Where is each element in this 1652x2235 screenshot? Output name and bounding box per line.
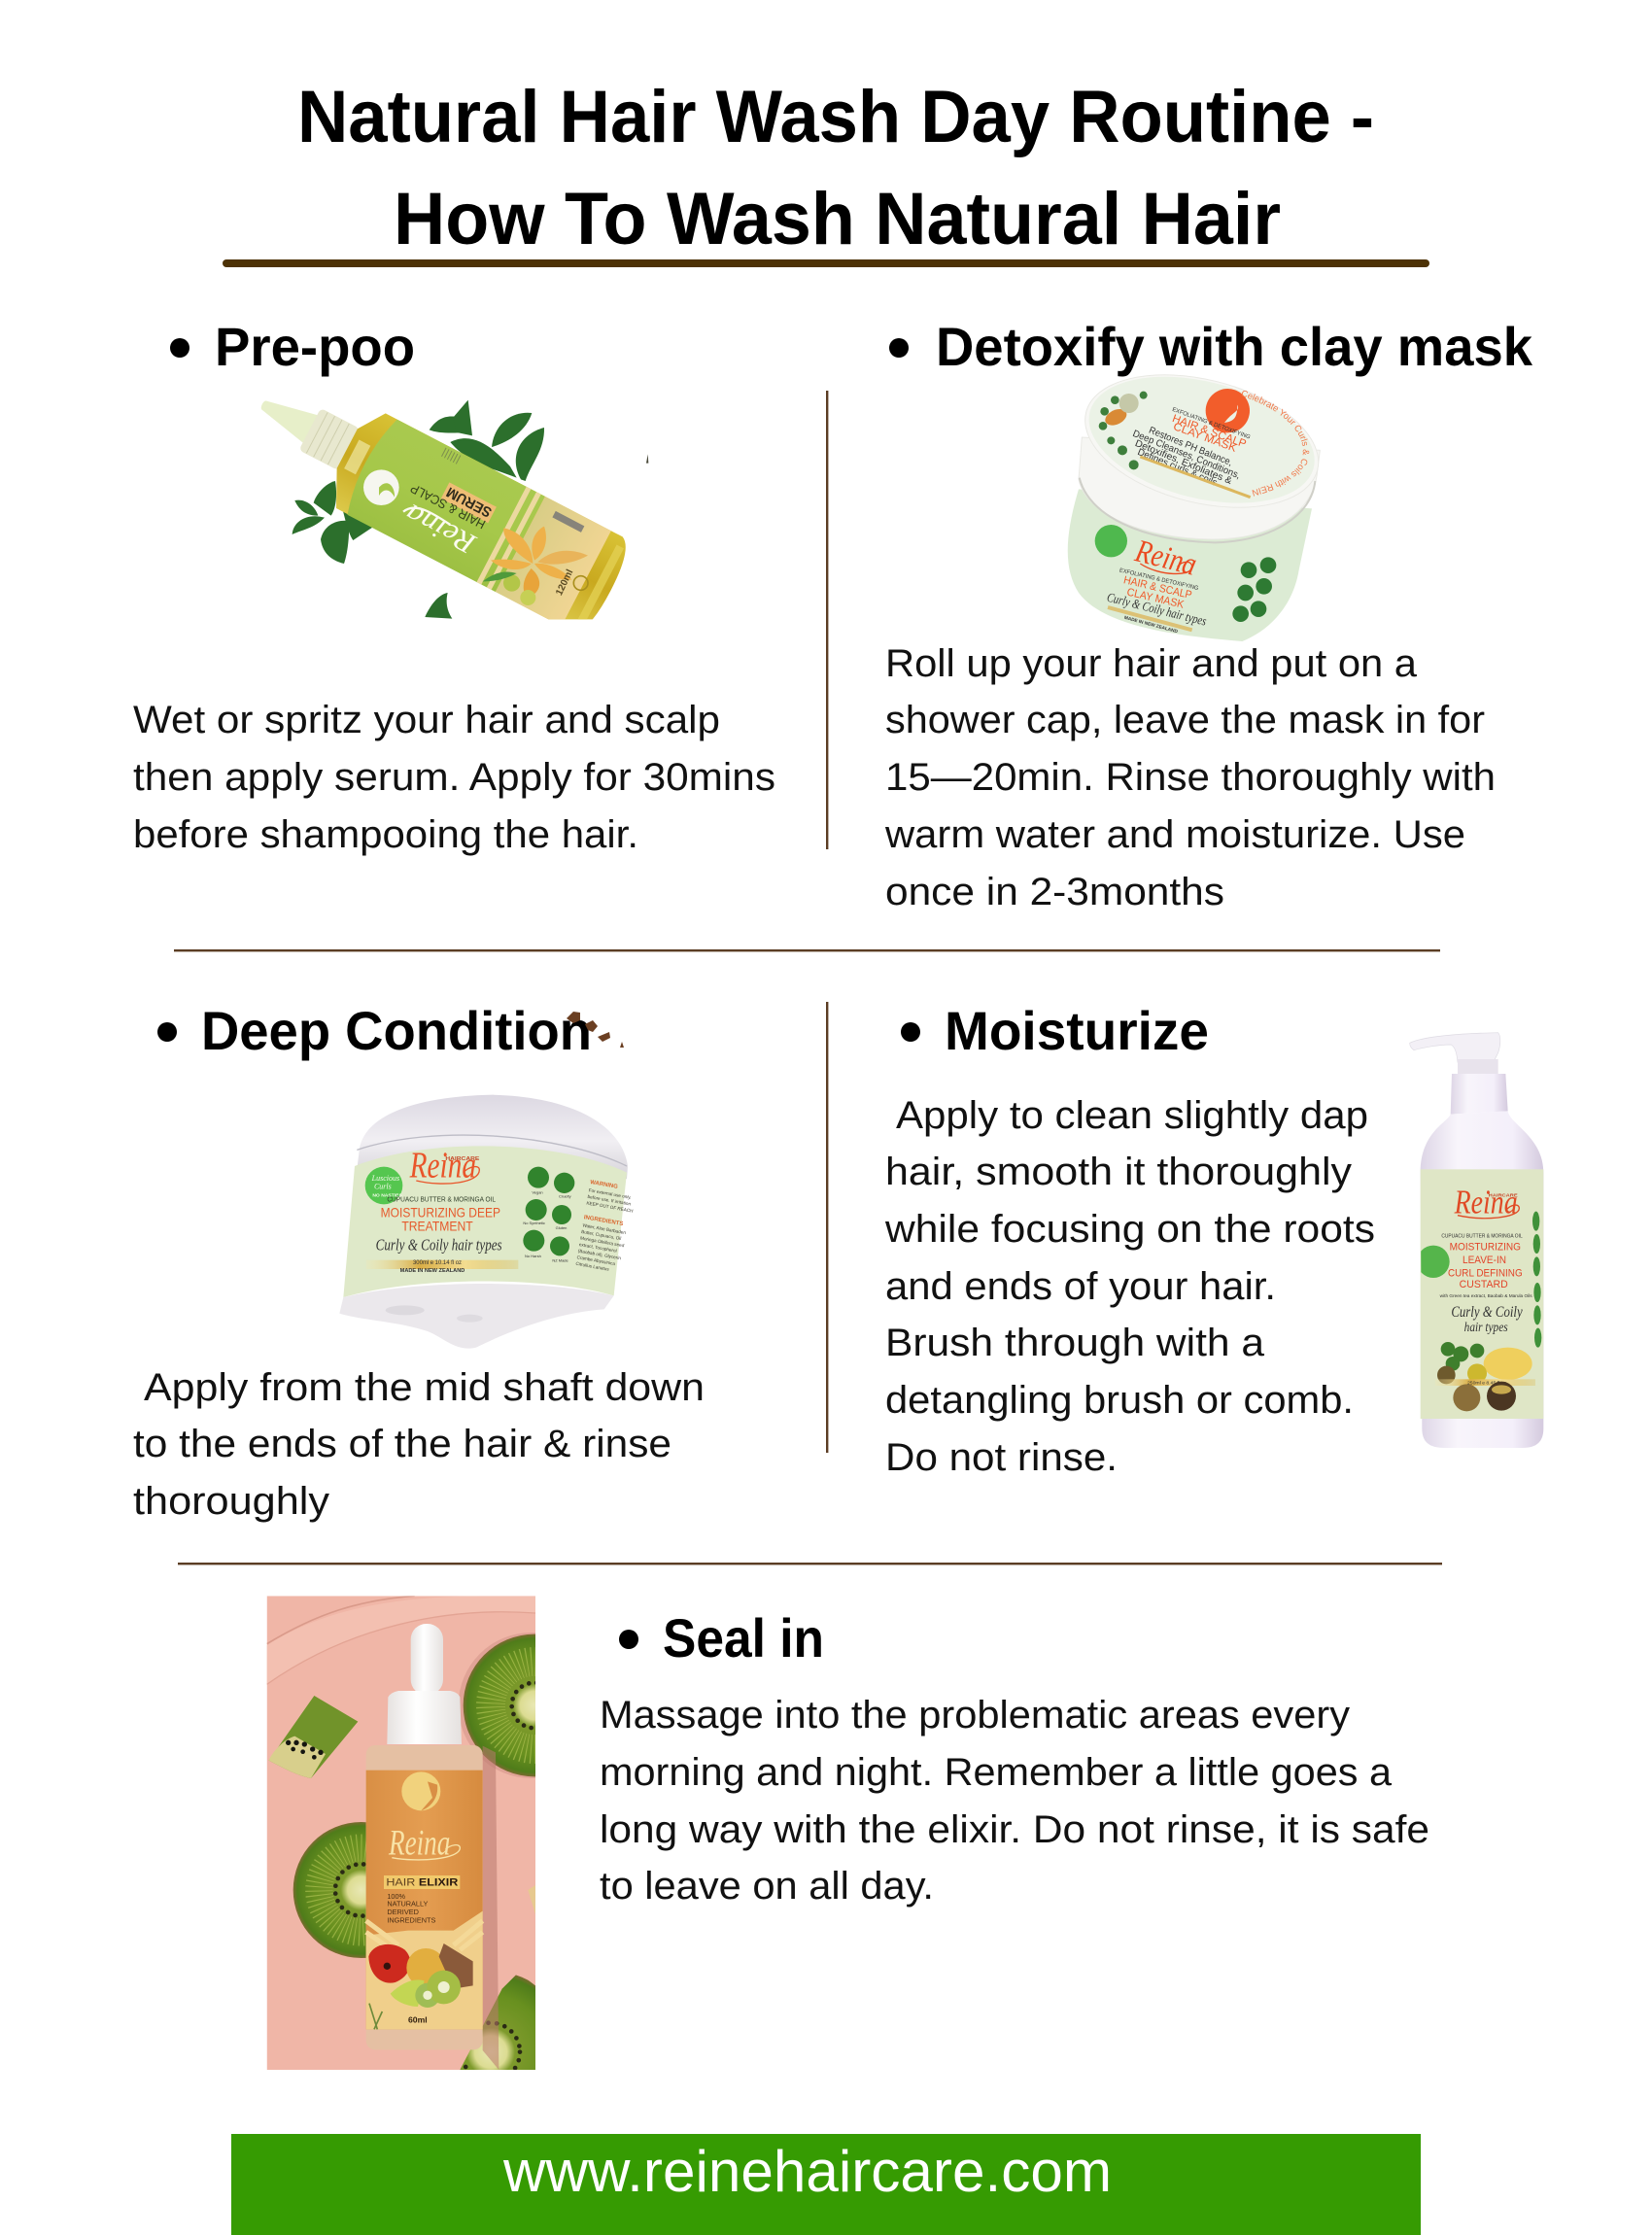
- product: clay mask jar: HAIR & SCALP: [1122, 574, 1193, 602]
- product: deep treatment jar: 300ml e 10.14 fl oz: [413, 1260, 462, 1266]
- text block: pre-poo instructions: [133, 699, 775, 856]
- text block: seal in instructions: to leave on all day.: [600, 1865, 934, 1908]
- text block: deep condition instructions: Apply from the mid shaft down: [144, 1366, 705, 1409]
- text block: clay mask instructions: [884, 642, 1496, 913]
- text block: pre-poo instructions: then apply serum. Apply for 30mins: [133, 756, 775, 799]
- title: Natural Hair Wash Day Routine -: [297, 76, 1374, 158]
- title: [297, 76, 1374, 260]
- text block: deep condition instructions: thoroughly: [133, 1480, 329, 1523]
- product: clay mask jar: Detoxifies, Exfoliates &: [1133, 438, 1234, 487]
- photo: hair elixir with kiwi: NATURALLY: [387, 1900, 429, 1908]
- product: deep treatment jar: MADE IN NEW ZEALAND: [400, 1268, 465, 1274]
- text block: seal in instructions: Massage into the problematic areas every: [600, 1694, 1350, 1736]
- photo: hair elixir with kiwi: DERIVED: [387, 1908, 419, 1916]
- product: deep treatment jar: Reina: [409, 1146, 476, 1186]
- product: deep treatment jar: Crambe Abyssinica: [576, 1255, 616, 1266]
- title: How To Wash Natural Hair: [394, 178, 1281, 260]
- photo: hair elixir with kiwi: [266, 1596, 535, 2070]
- product: hair and scalp serum bottle: Reina: [400, 498, 482, 561]
- product: deep treatment jar: INGREDIENTS: [583, 1215, 624, 1227]
- text block: clay mask instructions: 15—20min. Rinse thoroughly with: [885, 756, 1496, 799]
- product: clay mask jar: Celebrate Your Curls & Coils with REINA: [1242, 391, 1310, 497]
- product: deep treatment jar: Moringa Oleifera seed: [580, 1235, 625, 1248]
- product: clay mask jar: Curly & Coily hair types: [1106, 590, 1208, 629]
- product: deep treatment jar: No Synthetic: [523, 1221, 545, 1225]
- text block: pre-poo instructions: Wet or spritz your hair and scalp: [133, 699, 720, 741]
- product: hair and scalp serum bottle: SERUM: [444, 484, 495, 520]
- product: leave-in custard pump bottle: hair types: [1464, 1321, 1508, 1335]
- product: clay mask jar: [1067, 374, 1321, 641]
- text block: moisturize instructions: Do not rinse.: [885, 1436, 1118, 1479]
- text block: clay mask instructions: once in 2-3months: [885, 871, 1224, 913]
- photo: hair elixir with kiwi: 100%: [387, 1892, 406, 1901]
- photo: hair elixir with kiwi: Reina: [388, 1822, 450, 1862]
- product: clay mask jar: EXFOLIATING & DETOXIFYING: [1119, 567, 1199, 592]
- product: deep treatment jar: HAIRCARE: [445, 1156, 480, 1162]
- text block: pre-poo instructions: before shampooing the hair.: [133, 813, 638, 856]
- text block: moisturize instructions: detangling brush or comb.: [885, 1379, 1354, 1422]
- text block: moisturize instructions: and ends of your hair.: [885, 1265, 1276, 1308]
- product: clay mask jar: Reina: [1131, 533, 1200, 583]
- photo: hair elixir with kiwi: HAIR ELIXIR: [386, 1877, 459, 1889]
- product: leave-in custard pump bottle: with Green tea extract, Baobab & Marula Oils: [1440, 1293, 1532, 1298]
- heading: detoxify: Detoxify with clay mask: [936, 316, 1533, 377]
- heading: seal in: Seal in: [663, 1607, 824, 1668]
- product: deep treatment jar: Curly & Coily hair types: [376, 1236, 502, 1255]
- product: leave-in custard pump bottle: MOISTURIZING: [1450, 1242, 1521, 1254]
- text block: clay mask instructions: warm water and moisturize. Use: [884, 813, 1465, 856]
- product: deep treatment jar: NZ Made: [552, 1257, 569, 1262]
- product: hair and scalp serum bottle: [260, 400, 649, 620]
- heading: moisturize: Moisturize: [945, 1000, 1209, 1061]
- product: deep treatment jar: Water, Aloe Barbaden: [582, 1222, 627, 1235]
- product: clay mask jar: Restores PH Balance,: [1148, 426, 1234, 468]
- text block: clay mask instructions: shower cap, leave the mask in for: [885, 699, 1485, 741]
- product: clay mask jar: HAIR & SCALP: [1171, 413, 1248, 451]
- product: clay mask jar: CLAY MASK: [1172, 421, 1238, 455]
- text block: moisturize instructions: hair, smooth it thoroughly: [885, 1151, 1352, 1193]
- product: deep treatment jar: Gluten: [556, 1225, 567, 1230]
- product: clay mask jar: Defines curls & coils.: [1136, 447, 1221, 490]
- product: leave-in custard pump bottle: Curly & Coily: [1451, 1304, 1523, 1321]
- product: clay mask jar: CLAY MASK: [1125, 587, 1186, 611]
- text block: deep condition instructions: [133, 1366, 705, 1523]
- text block: clay mask instructions: Roll up your hair and put on a: [885, 642, 1418, 685]
- footer banner: website: www.reinehaircare.com: [502, 2139, 1112, 2204]
- heading: pre-poo: Pre-poo: [215, 316, 415, 377]
- product: leave-in custard pump bottle: CURL DEFINING: [1448, 1267, 1523, 1279]
- product: hair and scalp serum bottle: 120ml: [554, 567, 576, 598]
- text block: moisturize instructions: Apply to clean slightly dap: [896, 1094, 1368, 1137]
- product: leave-in custard pump bottle: CUPUACU BUTTER & MORINGA OIL: [1441, 1233, 1523, 1239]
- text block: moisturize instructions: [884, 1094, 1375, 1479]
- product: leave-in custard pump bottle: [1410, 1033, 1543, 1448]
- text block: seal in instructions: morning and night. Remember a little goes a: [600, 1751, 1393, 1794]
- product: deep treatment jar: extract, Tocopherol: [579, 1242, 617, 1254]
- product: leave-in custard pump bottle: CUSTARD: [1460, 1279, 1508, 1290]
- product: deep treatment jar: KEEP OUT OF REACH: [586, 1200, 634, 1214]
- product: leave-in custard pump bottle: Reina: [1454, 1183, 1518, 1221]
- product: deep treatment jar: TREATMENT: [401, 1220, 473, 1234]
- product: deep treatment jar: CUPUACU BUTTER & MORINGA OIL: [387, 1197, 496, 1204]
- product: deep treatment jar: before use. If irritation: [587, 1194, 632, 1207]
- product: leave-in custard pump bottle: LEAVE-IN: [1463, 1255, 1506, 1266]
- product: deep treatment jar: Curls: [374, 1182, 392, 1190]
- product: deep treatment jar: Vegan: [532, 1189, 543, 1194]
- product: deep treatment jar: MOISTURIZING DEEP: [381, 1206, 500, 1221]
- panel: moisturize: [884, 1000, 1543, 1479]
- product: deep treatment jar: [339, 1095, 637, 1349]
- footer banner: website: [231, 2134, 1421, 2235]
- panel: pre-poo: [133, 316, 775, 856]
- product: deep treatment jar: Citrullus Lanatus: [575, 1261, 610, 1272]
- product: deep treatment jar: Cruelty: [559, 1194, 571, 1199]
- panel: deep condition: [133, 1000, 705, 1523]
- panel: detoxify with clay mask: [884, 316, 1533, 913]
- product: leave-in custard pump bottle: HAIRCARE: [1489, 1193, 1518, 1199]
- product: deep treatment jar: Butter, Cupuacu, Oil: [581, 1229, 622, 1241]
- text block: moisturize instructions: while focusing on the roots: [884, 1208, 1375, 1251]
- panel: seal in: [266, 1596, 1428, 2070]
- product: deep treatment jar: No Harsh: [525, 1254, 541, 1258]
- product: deep treatment jar: Luscious: [371, 1174, 399, 1183]
- text block: deep condition instructions: to the ends of the hair & rinse: [133, 1423, 671, 1465]
- product: clay mask jar: EXFOLIATING & DETOXIFYING: [1171, 407, 1252, 441]
- text block: moisturize instructions: Brush through with a: [885, 1322, 1265, 1364]
- product: clay mask jar: Deep Cleanses, Conditions,: [1131, 429, 1242, 481]
- product: deep treatment jar: NO NASTIES: [372, 1193, 402, 1199]
- text block: seal in instructions: [600, 1694, 1429, 1908]
- heading: deep condition: Deep Condition: [201, 1000, 592, 1061]
- product: deep treatment jar: (Baobab oil), Glycerin: [577, 1249, 622, 1260]
- product: deep treatment jar: WARNING: [590, 1180, 619, 1190]
- product: hair and scalp serum bottle: HAIR & SCALP: [408, 481, 488, 532]
- text block: seal in instructions: long way with the elixir. Do not rinse, it is safe: [600, 1808, 1429, 1851]
- product: leave-in custard pump bottle: 250ml e 8.45 fl oz: [1467, 1380, 1506, 1386]
- product: deep treatment jar: For external use only.: [588, 1187, 632, 1200]
- product: clay mask jar: MADE IN NEW ZEALAND: [1123, 615, 1179, 634]
- photo: hair elixir with kiwi: INGREDIENTS: [387, 1915, 436, 1924]
- photo: hair elixir with kiwi: 60ml: [408, 2015, 428, 2025]
